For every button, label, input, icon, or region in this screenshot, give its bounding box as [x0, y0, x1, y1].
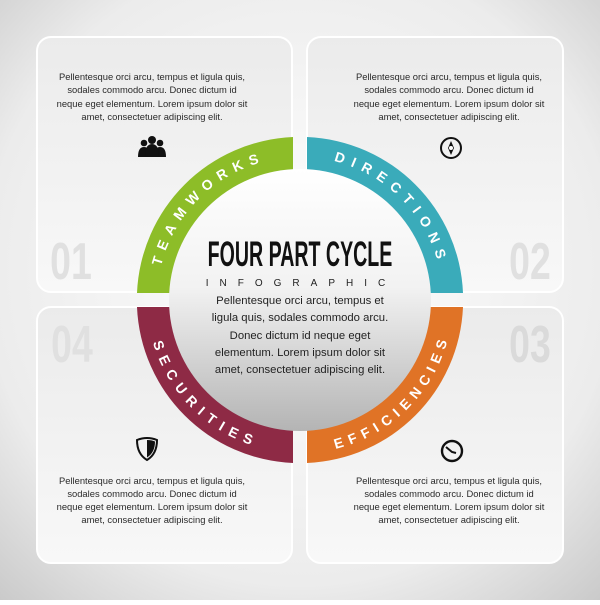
panel: 04 bottom-left: [37, 307, 292, 563]
text block 04: Pellentesque orci arcu, tempus et ligula quis,: [59, 475, 245, 486]
panel: 01 top-left: [37, 37, 292, 292]
icon: compass: [441, 138, 461, 158]
text block 01: amet, consectetuer adipiscing elit.: [81, 111, 223, 122]
center text: Pellentesque orci arcu, tempus et: [216, 295, 385, 307]
text block 04: sodales commodo arcu. Donec dictum id: [67, 488, 237, 499]
text block 03: Pellentesque orci arcu, tempus et ligula quis,: [356, 475, 542, 486]
text block 02: amet, consectetuer adipiscing elit.: [378, 111, 520, 122]
text block 02: sodales commodo arcu. Donec dictum id: [364, 84, 534, 95]
ring segment: directions: DIRECTIONS: [334, 152, 446, 258]
ring segment: teamworks: [137, 137, 293, 293]
ring segment: efficiencies: [307, 307, 463, 463]
center text: Donec dictum id neque eget: [230, 330, 371, 342]
text block 03: sodales commodo arcu. Donec dictum id: [364, 488, 534, 499]
center text: ligula quis, sodales commodo arcu.: [212, 312, 388, 324]
number 04: 04: [51, 315, 93, 373]
number 03: 03: [509, 315, 551, 373]
text block 01: Pellentesque orci arcu, tempus et ligula quis,: [59, 71, 245, 82]
ring segment: directions: [307, 137, 463, 293]
text block 03: neque eget elementum. Lorem ipsum dolor sit: [354, 501, 545, 512]
panel: 02 top-right: [307, 37, 563, 292]
text block 01: neque eget elementum. Lorem ipsum dolor sit: [57, 98, 248, 109]
center text: amet, consectetuer adipiscing elit.: [215, 364, 385, 376]
text block 03: amet, consectetuer adipiscing elit.: [378, 514, 520, 525]
text block 02: neque eget elementum. Lorem ipsum dolor sit: [354, 98, 545, 109]
title: FOUR PART CYCLE: [208, 235, 392, 275]
text block 04: amet, consectetuer adipiscing elit.: [81, 514, 223, 525]
subtitle: INFOGRAPHIC: [206, 278, 396, 289]
number 01: 01: [50, 232, 92, 290]
icon: shield: [137, 438, 157, 460]
text block 02: Pellentesque orci arcu, tempus et ligula quis,: [356, 71, 542, 82]
panel: 03 bottom-right: [307, 307, 563, 563]
text block 04: neque eget elementum. Lorem ipsum dolor sit: [57, 501, 248, 512]
ring segment: securities: SECURITIES: [154, 340, 252, 444]
number 02: 02: [509, 232, 551, 290]
center text: elementum. Lorem ipsum dolor sit: [215, 347, 386, 359]
icon: team: [138, 136, 166, 157]
ring segment: efficiencies: EFFICIENCIES: [334, 340, 446, 449]
center circle: [169, 169, 431, 431]
text block 01: sodales commodo arcu. Donec dictum id: [67, 84, 237, 95]
ring segment: teamworks: TEAMWORKS: [152, 154, 258, 264]
ring segment: securities: [137, 307, 293, 463]
icon: clock: [442, 441, 462, 461]
